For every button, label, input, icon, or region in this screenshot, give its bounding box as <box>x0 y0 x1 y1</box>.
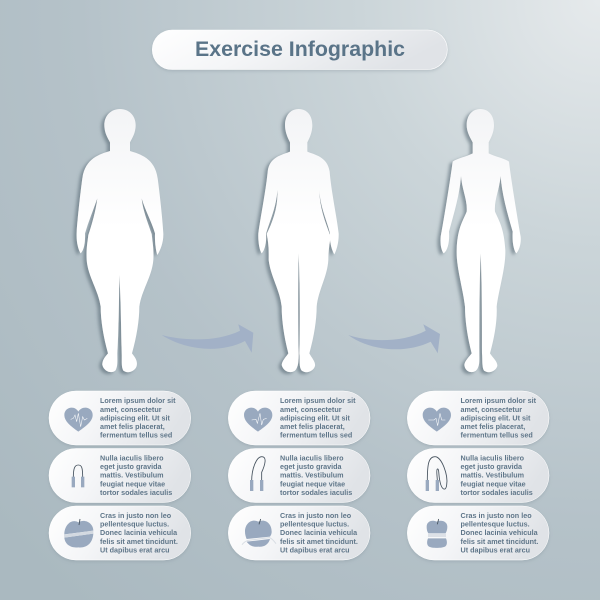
text block: mattis. Vestibulum <box>280 471 344 480</box>
text block: amet, consectetur <box>280 405 342 414</box>
text block: fermentum tellus sed <box>460 431 533 440</box>
icon: heart with pulse <box>244 408 272 432</box>
text block: fermentum tellus sed <box>100 431 172 440</box>
text block: Donec lacinia vehicula <box>280 528 358 537</box>
icon: apple with diagonal tape <box>64 519 93 548</box>
text block: Ut dapibus erat arcu <box>280 545 350 554</box>
arrow: first transition <box>162 324 253 353</box>
text block: pellentesque luctus. <box>100 520 169 529</box>
text block: feugiat neque vitae <box>100 479 165 488</box>
text block: Nulla iaculis libero <box>280 454 344 462</box>
panel: apple, column 1 <box>49 506 191 560</box>
text block: Lorem ipsum dolor sit <box>280 396 356 405</box>
panel: jump rope, column 1 <box>49 448 191 502</box>
text block: mattis. Vestibulum <box>460 471 524 480</box>
text block: tortor sodales iaculis <box>100 488 172 497</box>
panel: jump rope, column 3 <box>407 448 549 502</box>
text block: felis sit amet tincidunt. <box>100 537 178 546</box>
title <box>152 30 447 70</box>
text block: amet, consectetur <box>460 405 522 414</box>
icon: medium jump rope <box>250 457 265 491</box>
figure: heavy silhouette <box>77 109 163 372</box>
text block: Cras in justo non leo <box>460 511 532 520</box>
arrow: second transition <box>348 324 440 353</box>
text block: Lorem ipsum dolor sit <box>100 396 176 405</box>
text block: eget justo gravida <box>100 462 163 471</box>
icon: apple with tape <box>242 519 276 547</box>
text block: eget justo gravida <box>280 462 343 471</box>
text block: felis sit amet tincidunt. <box>460 537 538 546</box>
text block: amet, consectetur <box>100 405 162 414</box>
figure: slim silhouette <box>440 109 521 372</box>
panel: heart health, column 1 <box>49 391 191 445</box>
panel: jump rope, column 2 <box>228 448 370 502</box>
figure: mid silhouette <box>258 109 339 372</box>
text block: pellentesque luctus. <box>280 520 349 529</box>
text block: Nulla iaculis libero <box>460 454 525 462</box>
panel: apple, column 2 <box>228 506 370 560</box>
text block: fermentum tellus sed <box>280 431 352 440</box>
text block: Donec lacinia vehicula <box>460 528 539 537</box>
text block: tortor sodales iaculis <box>460 488 533 497</box>
panel: heart health, column 2 <box>228 391 370 445</box>
text block: amet felis placerat, <box>460 422 525 431</box>
icon: long jump rope <box>426 457 447 491</box>
text block: amet felis placerat, <box>100 422 165 431</box>
icon: heart with pulse <box>423 408 451 432</box>
text block: felis sit amet tincidunt. <box>280 537 358 546</box>
text block: tortor sodales iaculis <box>280 488 352 497</box>
icon: narrow apple with tape <box>427 519 447 548</box>
text block: mattis. Vestibulum <box>100 471 164 480</box>
text block: Donec lacinia vehicula <box>100 528 178 537</box>
text block: amet felis placerat, <box>280 422 345 431</box>
title: Exercise Infographic <box>195 38 405 61</box>
text block: adipiscing elit. Ut sit <box>460 413 531 422</box>
text block: eget justo gravida <box>460 462 523 471</box>
text block: adipiscing elit. Ut sit <box>280 413 350 422</box>
text block: pellentesque luctus. <box>460 520 530 529</box>
text block: Ut dapibus erat arcu <box>100 545 170 554</box>
text block: adipiscing elit. Ut sit <box>100 413 170 422</box>
panel: heart health, column 3 <box>407 391 549 445</box>
text block: feugiat neque vitae <box>460 479 526 488</box>
icon: heart with pulse <box>64 408 93 432</box>
text block: Ut dapibus erat arcu <box>460 545 530 554</box>
panel: apple, column 3 <box>407 506 549 560</box>
text block: feugiat neque vitae <box>280 479 345 488</box>
text block: Nulla iaculis libero <box>100 454 164 462</box>
text block: Lorem ipsum dolor sit <box>460 396 537 405</box>
text block: Cras in justo non leo <box>100 511 172 520</box>
icon: short jump rope <box>72 465 84 487</box>
text block: Cras in justo non leo <box>280 511 352 520</box>
